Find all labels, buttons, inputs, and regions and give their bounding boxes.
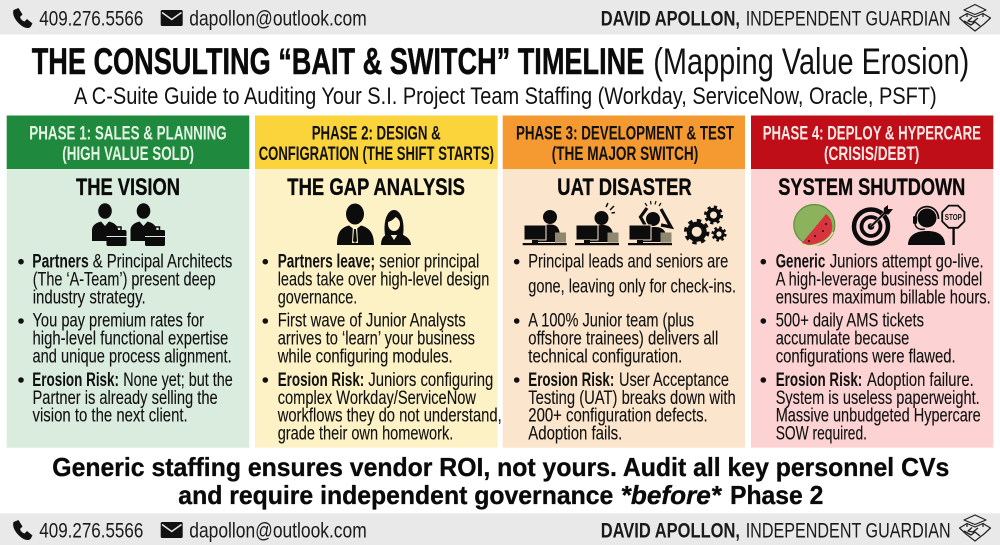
icon: man and woman in suits bbox=[337, 204, 411, 245]
icon: phone bbox=[13, 520, 32, 540]
panel: phase 1 bbox=[7, 116, 249, 448]
closing message: Generic staffing ensures vendor ROI, not yours. Audit all key personnel CVs bbox=[52, 452, 949, 482]
phase 2 bullets: workflows they do not understand, bbox=[277, 406, 502, 427]
phase 4 bullets: 500+ daily AMS tickets bbox=[776, 311, 924, 332]
phase 3 header bbox=[516, 122, 734, 165]
phase 4 bullets: SOW required. bbox=[776, 423, 867, 444]
closing message: and require independent governance bbox=[178, 480, 613, 510]
closing message: Phase 2 bbox=[730, 480, 823, 510]
phase 2 header bbox=[259, 122, 494, 165]
phase 3 bullets: Testing (UAT) breaks down with bbox=[528, 388, 736, 409]
phase 1 bullets: You pay premium rates for bbox=[32, 311, 205, 332]
icon: headset agent and stop sign bbox=[908, 205, 965, 245]
phase 1 bullets: Partners bbox=[32, 252, 89, 273]
phase 1 bullets: Partner is already selling the bbox=[32, 388, 218, 409]
email: dapollon@outlook.com bbox=[189, 519, 367, 542]
phase 2 bullets: leads take over high-level design bbox=[278, 270, 489, 291]
phase 4 bullets: accumulate because bbox=[776, 329, 909, 350]
name: DAVID APOLLON, bbox=[601, 519, 740, 542]
phase 1 bullets: and unique process alignment. bbox=[32, 346, 232, 367]
phase 4 bullets: Generic bbox=[776, 252, 826, 273]
icon: mail bbox=[161, 522, 183, 538]
icon: phone bbox=[13, 8, 32, 28]
phase 4 header bbox=[763, 122, 981, 165]
icon: mail bbox=[161, 10, 183, 26]
icon: worker at desk bbox=[523, 210, 567, 245]
phase 2 bullets bbox=[262, 252, 502, 444]
phase 1 bullets: (The ‘A-Team’) present deep bbox=[33, 270, 216, 291]
closing message bbox=[52, 452, 949, 510]
panel: phase 4 bbox=[751, 116, 993, 448]
phase 3 bullets: gone, leaving only for check-ins. bbox=[528, 276, 736, 297]
phase 2 header: PHASE 2: DESIGN & bbox=[312, 122, 441, 144]
phone number: 409.276.5566 bbox=[39, 519, 143, 542]
icon: target with arrow bbox=[854, 205, 893, 244]
icon: gears bbox=[686, 207, 725, 243]
phase 3 bullets: 200+ configuration defects. bbox=[528, 406, 708, 427]
phase 2 bullets: governance. bbox=[278, 288, 357, 309]
phase 3 bullets bbox=[514, 252, 736, 444]
phase 3 bullets: Erosion Risk: bbox=[528, 370, 614, 391]
phase 4 header: (CRISIS/DEBT) bbox=[824, 143, 919, 165]
phase 2 header: CONFIGRATION (THE SHIFT STARTS) bbox=[259, 143, 494, 165]
closing message: *before* bbox=[621, 480, 723, 510]
phase 2 bullets: Juniors configuring bbox=[368, 370, 493, 391]
phase 2 bullets: Partners leave; bbox=[278, 252, 375, 273]
phase 3 header: PHASE 3: DEVELOPMENT & TEST bbox=[516, 122, 734, 144]
icon: two business people with briefcases bbox=[92, 203, 165, 246]
phase 1 bullets: high-level functional expertise bbox=[32, 329, 228, 350]
icon: handshake shield bbox=[960, 515, 990, 541]
phase 3 heading: UAT DISASTER bbox=[557, 174, 692, 201]
phase 1 bullets: & Principal Architects bbox=[93, 252, 232, 273]
panel: phase 3 bbox=[503, 116, 745, 448]
phase 3 bullets: Adoption fails. bbox=[528, 423, 622, 444]
panel: phase 2 bbox=[255, 116, 502, 448]
phase 1 bullets bbox=[18, 252, 233, 427]
icon: headset agent and stop sign: STOP bbox=[945, 213, 962, 222]
phase 1 bullets: industry strategy. bbox=[33, 288, 146, 309]
phase 2 bullets: while configuring modules. bbox=[277, 346, 453, 367]
phase 2 bullets: complex Workday/ServiceNow bbox=[278, 388, 476, 409]
phase 3 bullets: User Acceptance bbox=[619, 370, 729, 391]
icon: stressed worker at desk bbox=[575, 203, 619, 245]
phase 1 header: (HIGH VALUE SOLD) bbox=[62, 143, 194, 165]
icon: watermelon bbox=[794, 204, 835, 246]
phase 2 bullets: Erosion Risk: bbox=[278, 370, 364, 391]
phase 1 bullets: None yet; but the bbox=[123, 370, 233, 391]
icon: handshake shield bbox=[960, 4, 990, 31]
phase 3 header: (THE MAJOR SWITCH) bbox=[552, 143, 698, 165]
phase 1 header bbox=[29, 122, 227, 165]
phase 1 bullets: Erosion Risk: bbox=[32, 370, 119, 391]
phone number: 409.276.5566 bbox=[39, 7, 143, 30]
phase 3 bullets: A 100% Junior team (plus bbox=[528, 311, 694, 332]
phase 1 header: PHASE 1: SALES & PLANNING bbox=[29, 122, 227, 144]
phase 3 bullets: Principal leads and seniors are bbox=[528, 252, 728, 273]
phase 2 bullets: First wave of Junior Analysts bbox=[278, 311, 466, 332]
phase 4 bullets: configurations were flawed. bbox=[776, 346, 956, 367]
phase 1 heading: THE VISION bbox=[76, 174, 180, 201]
phase 3 bullets: technical configuration. bbox=[528, 346, 682, 367]
phase 2 bullets: grade their own homework. bbox=[278, 423, 453, 444]
title: THE CONSULTING “BAIT & SWITCH” TIMELINE bbox=[32, 41, 644, 82]
icon: panicked worker holding head bbox=[628, 201, 672, 245]
name: DAVID APOLLON, bbox=[601, 7, 740, 30]
phase 4 bullets bbox=[760, 252, 991, 444]
phase 1 bullets: vision to the next client. bbox=[32, 406, 188, 427]
bottom contact bar bbox=[0, 513, 1000, 545]
phase 3 bullets: offshore trainees) delivers all bbox=[528, 329, 718, 350]
phase 4 bullets: Erosion Risk: bbox=[776, 370, 862, 391]
email: dapollon@outlook.com bbox=[189, 7, 367, 30]
phase 2 heading: THE GAP ANALYSIS bbox=[287, 174, 465, 201]
phase 2 bullets: arrives to ‘learn’ your business bbox=[278, 329, 475, 350]
phase 2 bullets: senior principal bbox=[379, 252, 479, 273]
top contact bar bbox=[0, 0, 1000, 34]
